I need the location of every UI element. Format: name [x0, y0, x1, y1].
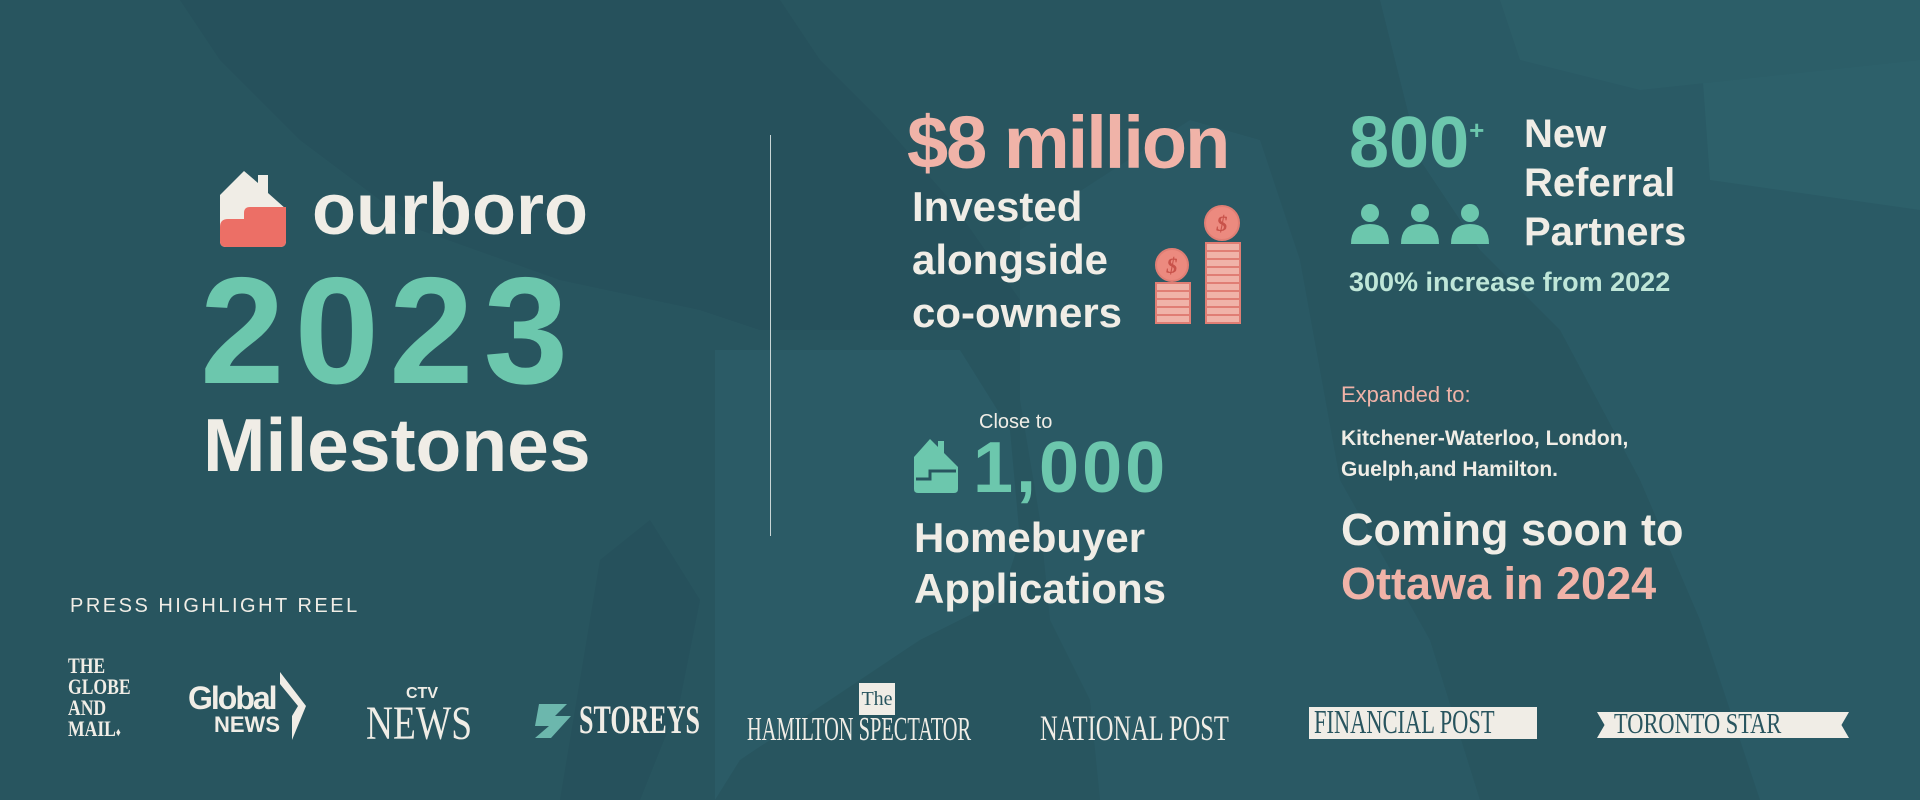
stat: 1,000: 1,000 — [973, 428, 1168, 508]
icon: house small — [914, 439, 958, 493]
logo: hamilton spectator: HAMILTON SPECTATOR — [747, 711, 971, 748]
callout: coming soon: Coming soon to — [1341, 504, 1683, 555]
callout: coming soon — [1341, 504, 1683, 609]
text: cities — [1341, 427, 1628, 481]
text: invested: alongside — [912, 236, 1108, 283]
text: cities: Kitchener-Waterloo, London, — [1341, 427, 1628, 450]
heading: press highlight reel: PRESS HIGHLIGHT REEL — [70, 595, 360, 617]
text: invested — [912, 183, 1122, 336]
wordmark: ourboro — [312, 170, 588, 250]
text: new referral partners: Referral — [1524, 161, 1675, 205]
text: expanded to: Expanded to: — [1341, 382, 1471, 407]
logo: globe and mail — [68, 653, 131, 741]
text: homebuyer applications — [914, 514, 1166, 612]
logo: globe and mail: AND — [68, 695, 106, 720]
icon: people — [1351, 204, 1489, 244]
logo: toronto star — [1597, 712, 1849, 738]
icon: coin stacks: $ — [1216, 211, 1228, 236]
logo: global news: Global — [188, 680, 276, 716]
text: 300% increase: 300% increase from 2022 — [1349, 267, 1670, 297]
logo: ourboro — [220, 170, 588, 250]
callout: coming soon: Ottawa in 2024 — [1341, 558, 1656, 609]
logo: hamilton spectator — [747, 683, 972, 748]
icon: house — [220, 171, 286, 247]
press logos — [68, 653, 1849, 750]
stat: $8 million: $8 million — [907, 101, 1228, 184]
divider — [770, 135, 771, 536]
text: invested: Invested — [912, 183, 1082, 230]
icon: coin stacks: $ — [1166, 253, 1178, 278]
text: cities: Guelph,and Hamilton. — [1341, 458, 1558, 481]
logo: national post: NATIONAL POST — [1040, 708, 1229, 748]
text: new referral partners — [1524, 112, 1686, 254]
logo: ctv news: NEWS — [366, 697, 472, 750]
text: homebuyer applications: Homebuyer — [914, 514, 1145, 561]
stat: 800+: 800+ — [1349, 103, 1484, 183]
logo: hamilton spectator: The — [861, 688, 893, 710]
subtitle: Milestones: Milestones — [203, 403, 591, 487]
text: new referral partners: New — [1524, 112, 1606, 156]
logo: globe and mail: GLOBE — [68, 674, 131, 699]
logo: global news: NEWS — [214, 712, 280, 737]
logo: globe and mail: THE — [68, 653, 105, 678]
logo: storeys: STOREYS — [579, 697, 700, 742]
text: new referral partners: Partners — [1524, 210, 1686, 254]
title: 2023: 2023 — [200, 246, 578, 416]
icon: coin stacks — [1155, 205, 1241, 324]
press logos: FINANCIAL POST — [1314, 704, 1495, 741]
logo: ctv news: CTV — [406, 685, 438, 702]
text: homebuyer applications: Applications — [914, 565, 1166, 612]
text: close to: Close to — [979, 411, 1052, 433]
logo: globe and mail: MAIL♦ — [68, 716, 121, 741]
text: invested: co-owners — [912, 289, 1122, 336]
logo: global news — [188, 672, 306, 740]
press logos: TORONTO STAR — [1614, 709, 1781, 740]
logo: financial post — [1309, 707, 1537, 739]
